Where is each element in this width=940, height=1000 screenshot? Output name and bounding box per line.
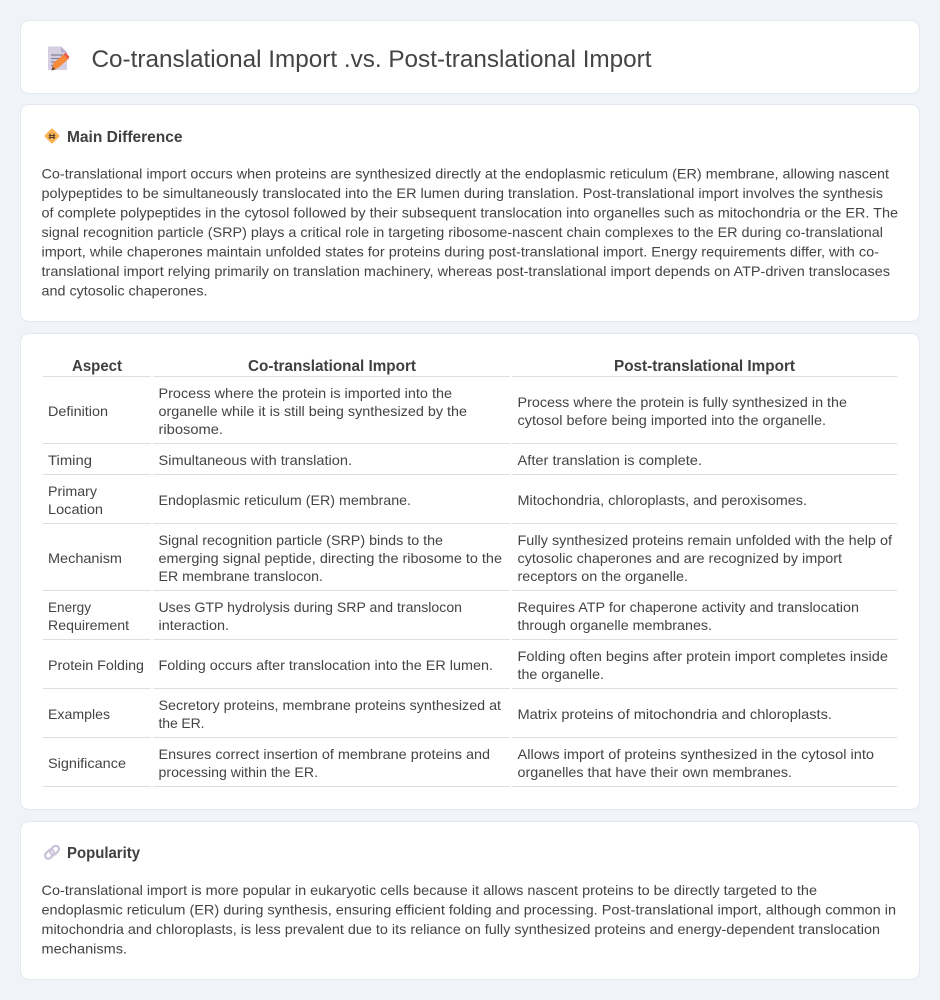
- row: timing: Timing: [48, 452, 92, 468]
- row: energy requirement: Requirement: [48, 617, 129, 633]
- text block: main difference paragraph: polypeptides to be simultaneously translocated into the ER lumen during translation. Post-translational import involves the synthesis: [42, 185, 883, 201]
- row: primary location: Primary: [48, 483, 97, 499]
- icon: orange diamond sign: [44, 128, 60, 144]
- row: significance: Significance: [48, 755, 126, 771]
- text block: main difference paragraph: translational import relying primarily on translation machinery, whereas post-translational import depends on ATP-driven translocases: [42, 263, 890, 279]
- text block: popularity paragraph: endoplasmic reticulum (ER) during synthesis, ensuring efficient folding and processing. Post-translational import, although common in: [42, 902, 896, 918]
- text block: main difference paragraph: and cytosolic chaperones.: [42, 282, 208, 298]
- heading: main difference: Main Difference: [67, 129, 183, 146]
- text block: main difference paragraph: [42, 166, 898, 298]
- row: examples: the ER.: [158, 715, 204, 731]
- row: definition: Definition: [48, 403, 108, 419]
- row: energy requirement: Requires ATP for chaperone activity and translocation: [518, 599, 859, 615]
- row: significance: [48, 746, 874, 780]
- row: energy requirement: Energy: [48, 599, 91, 615]
- row: significance: Ensures correct insertion of membrane proteins and: [158, 746, 490, 762]
- heading: popularity: Popularity: [67, 845, 140, 862]
- row: timing: After translation is complete.: [518, 452, 702, 468]
- row: primary location: Endoplasmic reticulum (ER) membrane.: [158, 492, 411, 508]
- row: protein folding: the organelle.: [518, 666, 604, 682]
- row: mechanism: Mechanism: [48, 550, 122, 566]
- row: primary location: Location: [48, 501, 103, 517]
- row: examples: [48, 697, 832, 731]
- panel: popularity: [20, 822, 920, 980]
- row: definition: [48, 385, 847, 437]
- row: definition: cytosol before being imported into the organelle.: [518, 412, 826, 428]
- table header row: Aspect: [72, 358, 123, 375]
- row: mechanism: emerging signal peptide, directing the ribosome to the: [158, 550, 502, 566]
- row: definition: organelle while it is still being synthesized by the: [158, 403, 467, 419]
- row: mechanism: cytosolic chaperones and are recognized by import: [518, 550, 842, 566]
- row: examples: Secretory proteins, membrane proteins synthesized at: [158, 697, 501, 713]
- table header row: Co-translational Import: [248, 358, 417, 375]
- row: protein folding: [48, 648, 888, 682]
- text block: popularity paragraph: mechanisms.: [42, 940, 127, 956]
- row: definition: Process where the protein is imported into the: [158, 385, 452, 401]
- title: Co-translational Import .vs. Post-translational Import: [92, 46, 652, 73]
- row: definition: Process where the protein is fully synthesized in the: [518, 394, 847, 410]
- text block: main difference paragraph: Co-translational import occurs when proteins are synthesized directly at the endoplasmic reticulum (ER) membrane, allowing nascent: [42, 166, 889, 182]
- row: significance: Allows import of proteins synthesized in the cytosol into: [518, 746, 874, 762]
- text block: main difference paragraph: import, while chaperones maintain unfolded states for proteins during post-translational import. Energy requirements differ, with co-: [42, 244, 879, 260]
- panel: comparison table: [20, 334, 920, 810]
- row: energy requirement: through organelle membranes.: [518, 617, 712, 633]
- row: mechanism: Fully synthesized proteins remain unfolded with the help of: [518, 532, 892, 548]
- icon: document with pencil: [48, 46, 70, 70]
- text block: main difference paragraph: signal recognition particle (SRP) plays a critical role in targeting ribosome-nascent chain complexes to the ER during co-translational: [42, 224, 883, 240]
- row: primary location: Mitochondria, chloroplasts, and peroxisomes.: [518, 492, 807, 508]
- row: definition: ribosome.: [158, 421, 223, 437]
- row: energy requirement: interaction.: [158, 617, 229, 633]
- text block: popularity paragraph: Co-translational import is more popular in eukaryotic cells because it allows nascent proteins to be directly targeted to the: [42, 882, 817, 898]
- row: mechanism: Signal recognition particle (SRP) binds to the: [158, 532, 443, 548]
- row: examples: Examples: [48, 706, 110, 722]
- row: mechanism: [48, 532, 892, 584]
- row: mechanism: ER membrane translocon.: [158, 568, 323, 584]
- table header row: [72, 358, 796, 375]
- row: protein folding: Folding occurs after translocation into the ER lumen.: [158, 657, 493, 673]
- row: protein folding: Protein Folding: [48, 657, 144, 673]
- text block: popularity paragraph: [42, 882, 896, 956]
- icon: link: [44, 844, 60, 860]
- row: examples: Matrix proteins of mitochondria and chloroplasts.: [518, 706, 832, 722]
- row: protein folding: Folding often begins after protein import completes inside: [518, 648, 888, 664]
- row: significance: processing within the ER.: [158, 764, 318, 780]
- row: timing: Simultaneous with translation.: [158, 452, 352, 468]
- row: mechanism: receptors on the organelle.: [518, 568, 688, 584]
- row: significance: organelles that have their own membranes.: [518, 764, 792, 780]
- row: timing: [48, 452, 702, 468]
- panel: main difference: [20, 104, 920, 322]
- row: primary location: [48, 483, 807, 517]
- panel: header: [20, 20, 920, 94]
- row: energy requirement: Uses GTP hydrolysis during SRP and translocon: [158, 599, 462, 615]
- row: energy requirement: [48, 599, 859, 633]
- text block: popularity paragraph: mitochondria and chloroplasts, is less prevalent due to its reliance on fully synthesized proteins and energy-dependent translocation: [42, 921, 880, 937]
- table header row: Post-translational Import: [614, 358, 796, 375]
- text block: main difference paragraph: of complete polypeptides in the cytosol followed by their subsequent translocation into organelles such as mitochondria or the ER. The: [42, 204, 898, 220]
